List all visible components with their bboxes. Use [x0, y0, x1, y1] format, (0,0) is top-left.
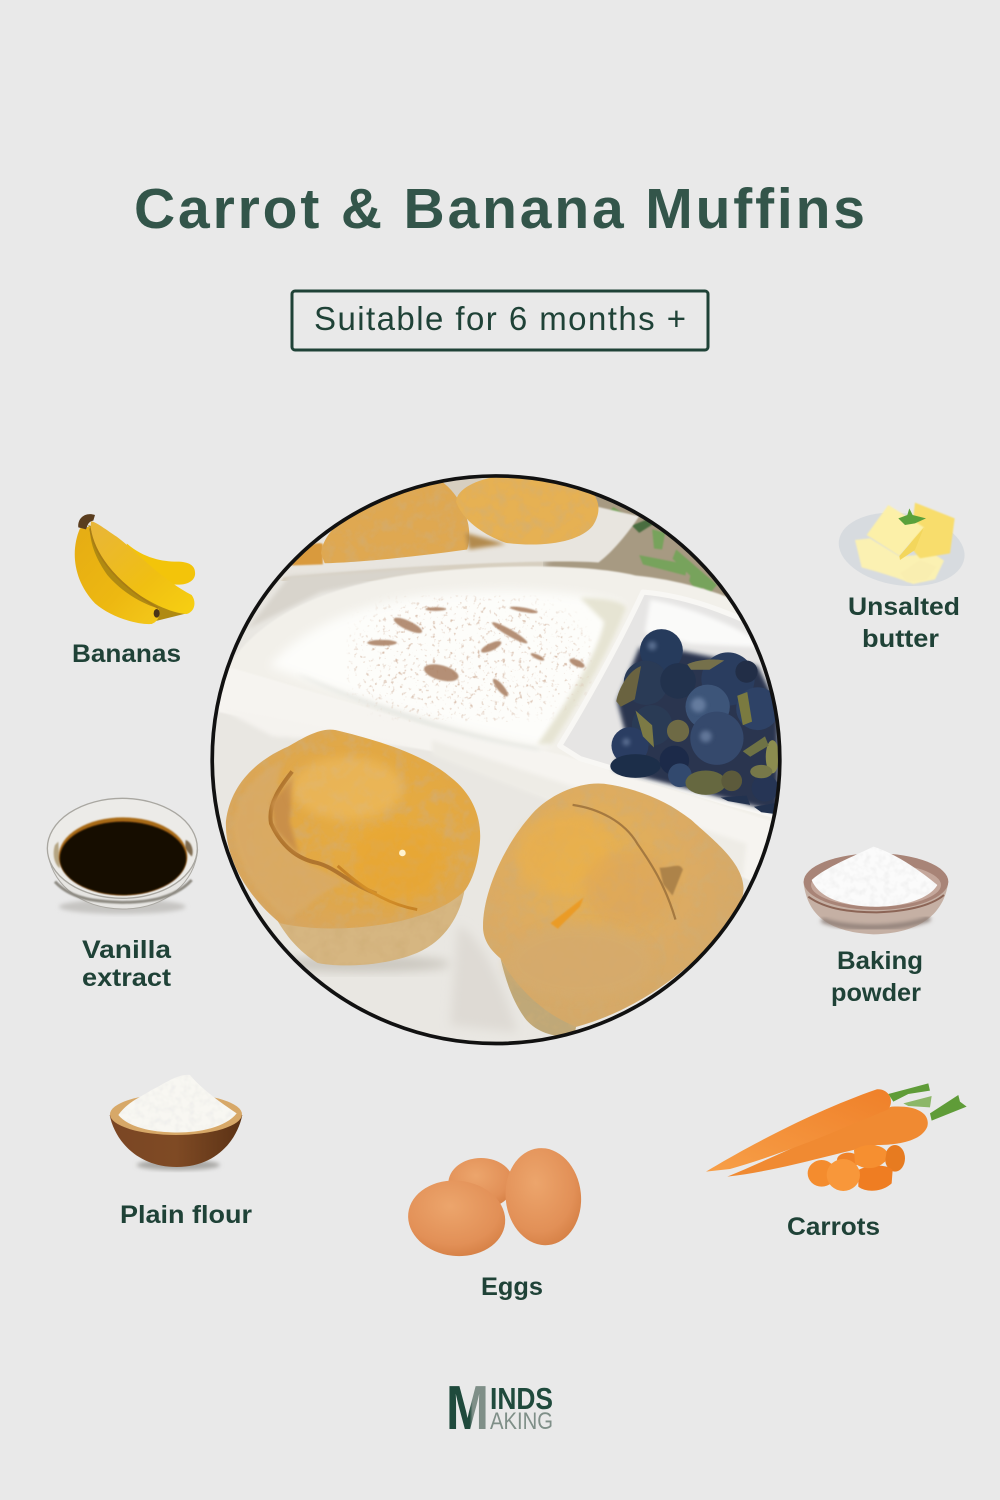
logo: [446, 1374, 553, 1443]
icon: unsalted butter: [834, 503, 969, 594]
dish front wall: [218, 671, 764, 881]
icon: bananas: [75, 514, 195, 624]
label: bananas: Bananas: [72, 640, 181, 668]
logo: INDS: [490, 1381, 553, 1416]
logo: M: [446, 1374, 489, 1443]
label: baking powder: powder: [831, 979, 921, 1007]
label: vanilla extract: Vanilla: [82, 936, 172, 964]
icon: plain flour: [110, 1075, 242, 1170]
top muffins: [291, 543, 323, 565]
icon: baking powder: [803, 847, 948, 934]
label: vanilla extract: [82, 936, 172, 992]
label: vanilla extract: extract: [82, 964, 172, 992]
label: unsalted butter: Unsalted: [848, 593, 960, 621]
top plate: [278, 506, 640, 581]
icon: carrots: [706, 1083, 967, 1191]
blueberries: [610, 629, 779, 814]
cinnamon dust: [347, 596, 591, 722]
age badge: Suitable for 6 months +: [314, 300, 686, 337]
blueberry well: [560, 592, 790, 820]
main dish: [230, 566, 772, 820]
age badge: [292, 291, 708, 350]
label: baking powder: [831, 947, 923, 1007]
background behind the dishes: [543, 496, 726, 598]
yogurt: [269, 590, 623, 748]
title: Carrot & Banana Muffins: [134, 177, 865, 241]
central photo: muffins, yogurt and blueberries: [210, 470, 790, 1050]
label: unsalted butter: butter: [862, 625, 939, 653]
icon: vanilla extract: [47, 798, 198, 914]
greens: [610, 506, 717, 592]
shadows on plate: [273, 956, 450, 972]
icon: eggs: [404, 1144, 586, 1261]
label: carrots: Carrots: [787, 1213, 880, 1241]
logo: AKING: [490, 1408, 553, 1435]
label: eggs: Eggs: [481, 1273, 543, 1301]
label: plain flour: Plain flour: [120, 1201, 252, 1229]
label: unsalted butter: [848, 593, 960, 653]
muffin left: [226, 730, 480, 965]
muffin right: [483, 784, 744, 1036]
label: baking powder: Baking: [837, 947, 923, 975]
